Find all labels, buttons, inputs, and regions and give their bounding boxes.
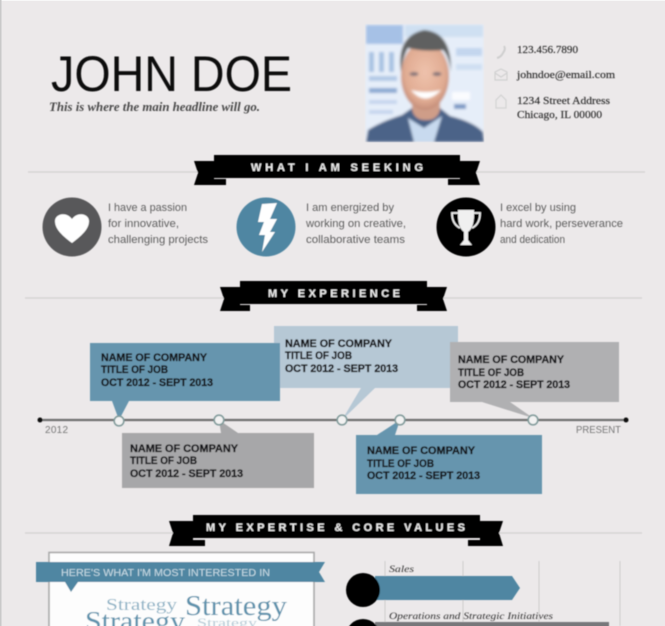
bar: sales: [375, 576, 520, 600]
icon: house: [496, 95, 506, 108]
experience box: upper light blue: NAME OF COMPANY: [285, 338, 392, 350]
heading ribbon: my experience: [220, 281, 447, 311]
timeline axis: [38, 418, 628, 422]
photo: portrait: [365, 24, 484, 142]
label: sales: Sales: [389, 565, 414, 575]
icon: phone: [497, 46, 505, 58]
end label: PRESENT: [576, 425, 621, 436]
icon: operations circle: [346, 619, 380, 626]
experience box: lower blue: [356, 420, 542, 494]
experience box: upper light blue: [274, 326, 458, 420]
heading ribbon: expertise and core values: [169, 515, 503, 546]
experience box: lower grey: TITLE OF JOB: [130, 455, 197, 467]
ribbon: interests heading: [36, 562, 325, 592]
subtitle: headline: This is where the main headline will go.: [49, 100, 260, 114]
text: energized: I am energized by: [306, 202, 395, 214]
panel: interests word cloud: [36, 552, 325, 626]
text: passion: challenging projects: [108, 234, 209, 246]
contact details: [495, 44, 615, 121]
phone number: 123.456.7890: [517, 44, 579, 56]
heading ribbon: expertise and core values: MY EXPERTISE & CORE VALUES: [206, 522, 465, 534]
timeline markers: [114, 415, 538, 426]
icon: lightning bolt: [236, 198, 296, 256]
experience box: lower grey: NAME OF COMPANY: [130, 443, 238, 455]
experience box: lower blue: OCT 2012 - SEPT 2013: [367, 470, 480, 482]
experience box: lower blue: TITLE OF JOB: [367, 458, 434, 470]
text: energized: [305, 202, 406, 246]
experience box: upper blue: TITLE OF JOB: [101, 364, 168, 376]
ribbon: interests heading: HERE'S WHAT I'M MOST INTERESTED IN: [61, 567, 270, 579]
experience box: lower blue: NAME OF COMPANY: [367, 445, 475, 457]
experience box: upper light blue: TITLE OF JOB: [285, 350, 352, 362]
heading ribbon: what I am seeking: [194, 155, 480, 185]
heading ribbon: my experience: MY EXPERIENCE: [268, 288, 400, 300]
timeline: [38, 326, 628, 494]
seeking item: energized: [236, 198, 406, 256]
title: name: JOHN DOE: [51, 46, 292, 102]
bar: operations: [375, 622, 609, 626]
contact details: Chicago, IL 00000: [517, 109, 603, 121]
word cloud: [85, 590, 288, 626]
text: passion: for innovative,: [108, 218, 179, 230]
seeking item: hard work: [436, 198, 623, 256]
icon: mail: [495, 69, 507, 80]
heading ribbon: what I am seeking: WHAT I AM SEEKING: [251, 162, 423, 174]
text: passion: I have a passion: [108, 202, 187, 214]
word cloud: Strategy: [185, 590, 288, 622]
address: 1234 Street Address: [517, 95, 610, 107]
experience box: upper blue: [90, 343, 280, 420]
text: passion: [108, 202, 209, 246]
chart: expertise bars: [346, 561, 620, 626]
start label: 2012: [45, 425, 68, 436]
experience box: upper blue: OCT 2012 - SEPT 2013: [101, 377, 213, 389]
icon: sales circle: [346, 573, 380, 607]
text: energized: collaborative teams: [306, 234, 406, 246]
experience box: lower grey: [122, 420, 314, 488]
experience box: lower grey: OCT 2012 - SEPT 2013: [130, 468, 243, 480]
text: hard work: hard work, perseverance: [500, 218, 623, 230]
word cloud: Strategy: [106, 595, 178, 614]
label: operations: Operations and Strategic Initiatives: [389, 612, 553, 622]
experience box: upper grey: TITLE OF JOB: [458, 367, 524, 379]
experience box: upper light blue: OCT 2012 - SEPT 2013: [285, 363, 398, 375]
text: energized: working on creative,: [305, 218, 406, 230]
experience box: upper grey: OCT 2012 - SEPT 2013: [458, 379, 570, 391]
text: hard work: I excel by using: [500, 202, 576, 214]
seeking item: passion: [42, 198, 209, 256]
text: hard work: [500, 202, 623, 246]
text: hard work: and dedication: [500, 234, 565, 246]
email: johndoe@email.com: [516, 69, 615, 81]
experience box: upper grey: [450, 342, 619, 418]
experience box: upper grey: NAME OF COMPANY: [458, 354, 564, 366]
icon: heart: [42, 198, 102, 256]
icon: trophy: [436, 198, 496, 256]
experience box: upper blue: NAME OF COMPANY: [101, 352, 207, 364]
